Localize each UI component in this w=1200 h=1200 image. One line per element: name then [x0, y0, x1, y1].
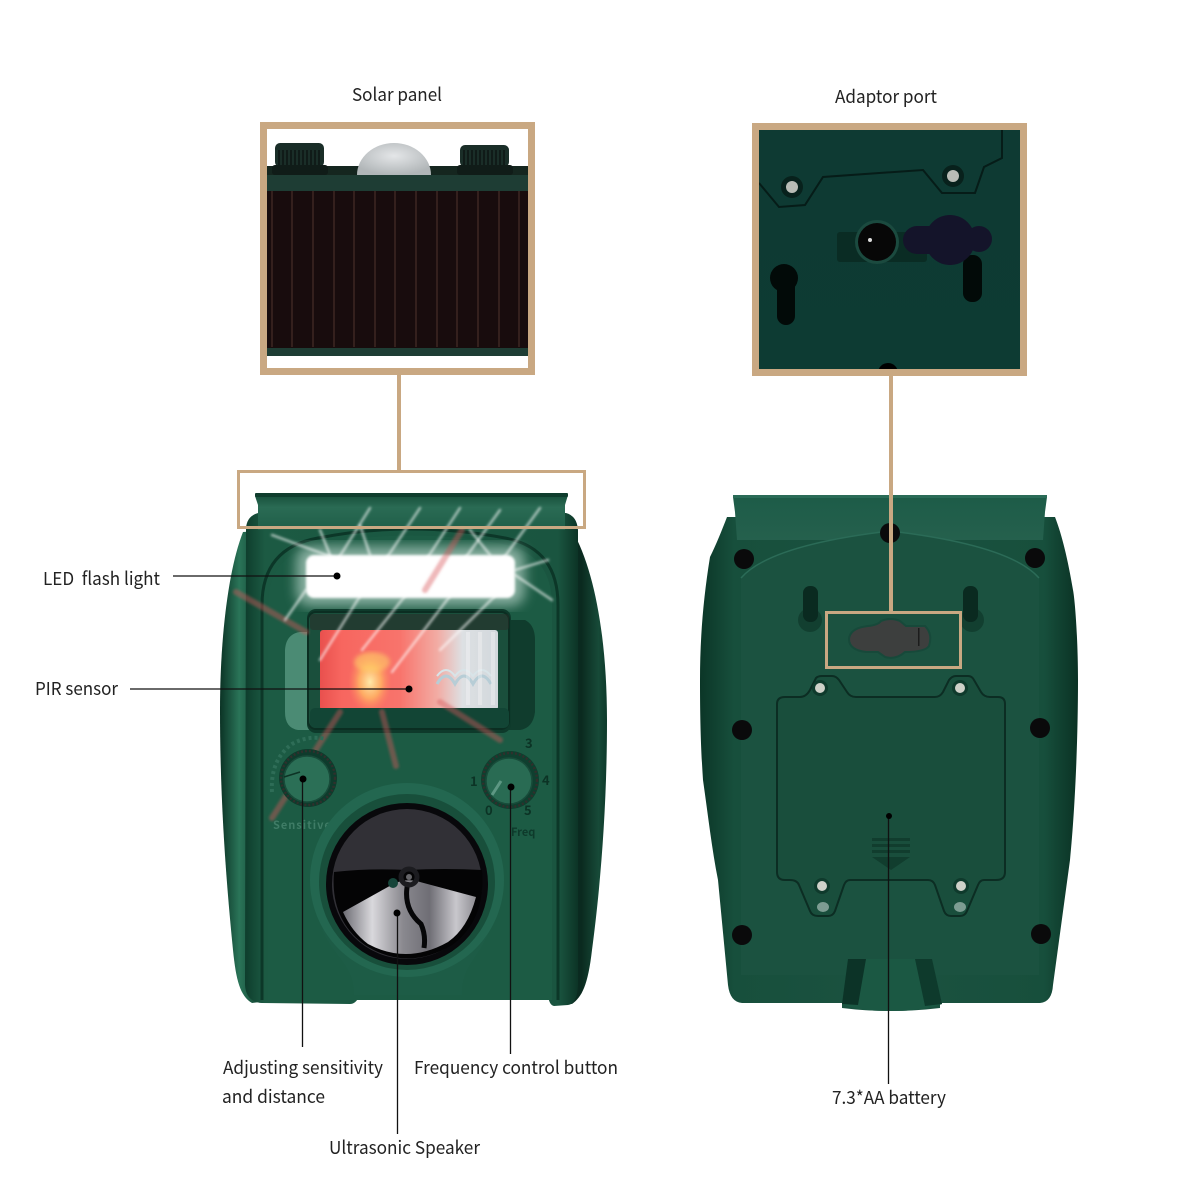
LED flash light [306, 555, 515, 598]
sensor dome [357, 143, 431, 175]
detail photo background [756, 127, 1024, 373]
panel: solar panel detail [264, 126, 532, 372]
right dial: frequency: 0 [485, 800, 493, 819]
heading: Adaptor port: Adaptor port [835, 83, 937, 109]
screw holes [732, 523, 1051, 945]
red light rays [236, 530, 500, 818]
tan frame [756, 126, 1024, 372]
battery cover outline [759, 130, 1002, 207]
connector: adaptor port to rubber cover [826, 372, 960, 668]
callout: 7.3*AA battery: 7.3*AA battery [832, 1084, 947, 1110]
battery cover screws [812, 680, 969, 912]
rubber cover [903, 215, 992, 265]
front body shell [245, 513, 578, 1006]
callout: Adjusting sensitivity and distance [222, 776, 384, 1109]
callout: Ultrasonic Speaker [329, 910, 481, 1160]
back raised panel [741, 531, 1039, 975]
device top edge [267, 166, 528, 175]
right side bulge [550, 530, 607, 1004]
right dial: frequency: 4 [542, 770, 550, 789]
power jack [855, 220, 899, 264]
right dial: frequency [470, 733, 550, 840]
left side bulge [220, 530, 275, 1003]
rubber port cover [849, 619, 930, 658]
right dial: frequency: 1 [470, 771, 478, 790]
panel: front view of device [220, 493, 607, 1006]
top lid [255, 495, 568, 530]
solar cell surface [267, 191, 528, 348]
callout: Frequency control button: Frequency control button [414, 1054, 618, 1080]
detail photo background [264, 126, 531, 372]
right dial: frequency: 5 [524, 800, 532, 819]
PIR sensor recess [285, 632, 310, 730]
connector: solar panel to device top [238, 372, 584, 528]
keyhole slots [770, 264, 798, 292]
panel: adaptor port detail [756, 126, 1024, 373]
back outer shell [700, 517, 1078, 1011]
white light rays [272, 508, 552, 672]
panel: back view of device [700, 495, 1078, 1011]
LED glow [296, 546, 525, 606]
ultrasonic speaker [326, 803, 488, 965]
knobs [275, 143, 509, 167]
bottom stand stub [842, 959, 942, 1011]
callout: Adjusting sensitivity and distance: Adjusting sensitivity [223, 1054, 384, 1080]
callout: LED flash light: LED flash light [43, 565, 160, 591]
PIR sensor lens with red glow [320, 630, 498, 710]
tan frame [264, 126, 532, 372]
keyhole slots [798, 586, 984, 632]
back top lid [733, 497, 1047, 540]
callout: Adjusting sensitivity and distance: and distance [222, 1083, 325, 1109]
callout: PIR sensor [35, 675, 412, 701]
heading: Solar panel: Solar panel [352, 81, 442, 107]
right dial: frequency: 3 [525, 733, 533, 752]
screws [781, 176, 803, 198]
left dial: sensitivity [272, 738, 337, 833]
inner face outline [262, 529, 558, 1000]
callout: Ultrasonic Speaker: Ultrasonic Speaker [329, 1134, 481, 1160]
right dial: frequency: Freq [511, 824, 535, 840]
PIR sensor frame [307, 609, 511, 733]
callout: 7.3*AA battery [832, 813, 947, 1110]
left dial: sensitivity: Sensitive [273, 817, 332, 833]
callout: Frequency control button [414, 784, 618, 1080]
speaker housing [322, 930, 490, 995]
battery cover [777, 676, 1005, 916]
arrow marks on battery cover [872, 838, 910, 870]
port recess [837, 232, 927, 262]
callout: LED flash light [43, 565, 340, 591]
callout: PIR sensor: PIR sensor [35, 675, 119, 701]
